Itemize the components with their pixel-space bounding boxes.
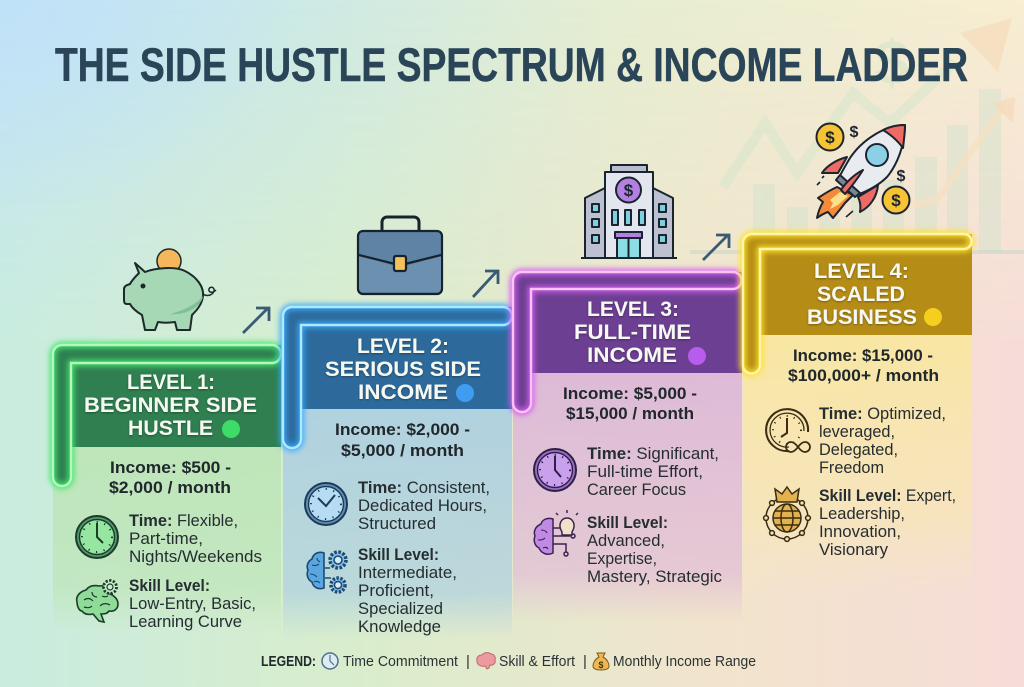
level 2 heading: SERIOUS SIDE xyxy=(325,358,481,381)
level 2 income: $5,000 / month xyxy=(341,441,464,460)
level 4 heading: LEVEL 4: xyxy=(814,260,909,283)
level 1 time text: Time: Flexible, xyxy=(129,511,238,530)
level 4 skill text: Visionary xyxy=(819,540,889,559)
level 1 income: Income: $500 - xyxy=(110,458,231,477)
level 2 skill text xyxy=(358,545,457,636)
legend icon: clock xyxy=(322,653,338,669)
icon: office building with dollar xyxy=(581,165,677,258)
level 4 time text: leveraged, xyxy=(819,422,895,441)
level 2 skill text: Knowledge xyxy=(358,617,441,636)
level 1 skill text xyxy=(129,576,256,631)
icon: rocket with coins: $ xyxy=(825,128,835,147)
level 3 income: Income: $5,000 - xyxy=(563,384,697,403)
legend: | xyxy=(466,653,470,670)
icon: purple clock xyxy=(534,449,576,491)
arrow: level 1 to 2 xyxy=(243,308,269,333)
level 3 skill text: Advanced, xyxy=(587,531,665,550)
level 4 skill text: Leadership, xyxy=(819,504,905,523)
background growth chart watermark xyxy=(690,18,1024,254)
level 3 income: $15,000 / month xyxy=(566,404,694,423)
level 4 heading: SCALED xyxy=(817,283,905,306)
level 2 income xyxy=(335,420,470,460)
level 2 time text: Dedicated Hours, xyxy=(358,496,487,515)
level 4 time text: Time: Optimized, xyxy=(819,404,946,423)
level 2 heading: LEVEL 2: xyxy=(357,335,449,358)
icon: crown and globe xyxy=(764,487,810,541)
legend icon: brain xyxy=(477,653,495,669)
level 2 heading xyxy=(325,335,481,404)
panel: level 3 xyxy=(513,272,742,623)
panel: level 1 xyxy=(53,345,281,633)
level 3 heading: FULL-TIME xyxy=(574,321,691,344)
level 3 skill text: Skill Level: xyxy=(587,513,668,532)
level 2 time text: Structured xyxy=(358,514,436,533)
level 1 skill text: Skill Level: xyxy=(129,576,210,595)
level 4 skill text xyxy=(819,486,956,559)
legend: Monthly Income Range xyxy=(613,653,756,670)
level 2 skill text: Specialized xyxy=(358,599,443,618)
panel: level 2 xyxy=(283,307,512,639)
level 1 skill text: Learning Curve xyxy=(129,612,242,631)
level 1 header band xyxy=(53,345,281,486)
icon: green clock xyxy=(76,516,118,558)
level 3 heading xyxy=(574,298,706,367)
icon: rocket with coins: $ xyxy=(897,168,906,185)
level 2 skill text: Skill Level: xyxy=(358,545,439,564)
level 1 income: $2,000 / month xyxy=(109,478,231,497)
level 4 skill text: Skill Level: Expert, xyxy=(819,486,956,505)
level 2 time text: Time: Consistent, xyxy=(358,478,490,497)
level 3 time text: Full-time Effort, xyxy=(587,462,703,481)
level 2 time text xyxy=(358,478,490,533)
level 3 heading: LEVEL 3: xyxy=(587,298,679,321)
legend: Skill & Effort xyxy=(499,653,576,670)
level 2 header band xyxy=(283,307,512,448)
level 4 income xyxy=(788,346,939,385)
icon: piggy bank xyxy=(124,249,216,330)
level 1 heading: BEGINNER SIDE xyxy=(84,394,257,417)
level 2 heading: INCOME xyxy=(358,381,448,404)
panel: level 4 xyxy=(743,234,972,597)
legend: | xyxy=(583,653,587,670)
icon: rocket with coins: $ xyxy=(850,124,859,141)
level 4 income: Income: $15,000 - xyxy=(793,346,933,365)
legend: Time Commitment xyxy=(343,653,459,670)
level 2 income: Income: $2,000 - xyxy=(335,420,470,439)
icon: rocket with coins: $ xyxy=(891,191,901,210)
level 2 skill text: Intermediate, xyxy=(358,563,457,582)
level 4 income: $100,000+ / month xyxy=(788,366,939,385)
icon: briefcase xyxy=(358,217,442,294)
level 3 skill text: Expertise, xyxy=(587,549,657,568)
icon: clock with infinity xyxy=(766,409,810,452)
arrow: level 3 to 4 xyxy=(703,235,729,260)
level 3 time text: Career Focus xyxy=(587,480,686,499)
level 4 time text xyxy=(819,404,946,477)
level 1 time text: Nights/Weekends xyxy=(129,547,262,566)
level 1 skill text: Low-Entry, Basic, xyxy=(129,594,256,613)
level 4 heading xyxy=(807,260,942,329)
level 3 header band xyxy=(513,272,742,412)
icon: blue clock xyxy=(305,483,347,525)
icon: blue brain with gears xyxy=(307,552,346,592)
level 1 heading: LEVEL 1: xyxy=(127,371,215,394)
legend icon: money bag xyxy=(593,653,609,670)
level 1 income xyxy=(109,458,231,497)
level 1 time text: Part-time, xyxy=(129,529,203,548)
legend xyxy=(261,653,756,670)
level 3 time text: Time: Significant, xyxy=(587,444,719,463)
level 3 time text xyxy=(587,444,719,499)
arrow: level 2 to 3 xyxy=(473,271,498,297)
level 4 skill text: Innovation, xyxy=(819,522,901,541)
level 4 header band xyxy=(743,234,972,374)
legend: LEGEND: xyxy=(261,653,316,670)
icon: rocket with coins xyxy=(816,124,910,218)
icon: office building with dollar: $ xyxy=(624,181,634,200)
icon: green brain with gear xyxy=(77,580,118,622)
level 4 time text: Delegated, xyxy=(819,440,898,459)
level 3 skill text xyxy=(587,513,722,586)
level 3 skill text: Mastery, Strategic xyxy=(587,567,722,586)
background growth chart watermark: $ xyxy=(875,29,909,98)
icon: purple brain with lightbulb circuit xyxy=(534,510,578,556)
level 2 skill text: Proficient, xyxy=(358,581,434,600)
level 1 time text xyxy=(129,511,262,566)
legend icon: money bag: $ xyxy=(598,660,604,670)
level 4 heading: BUSINESS xyxy=(807,306,917,329)
level 4 time text: Freedom xyxy=(819,458,884,477)
level 3 income xyxy=(563,384,697,423)
level 1 heading xyxy=(84,371,257,440)
level 3 heading: INCOME xyxy=(587,344,677,367)
level 1 heading: HUSTLE xyxy=(128,417,213,440)
